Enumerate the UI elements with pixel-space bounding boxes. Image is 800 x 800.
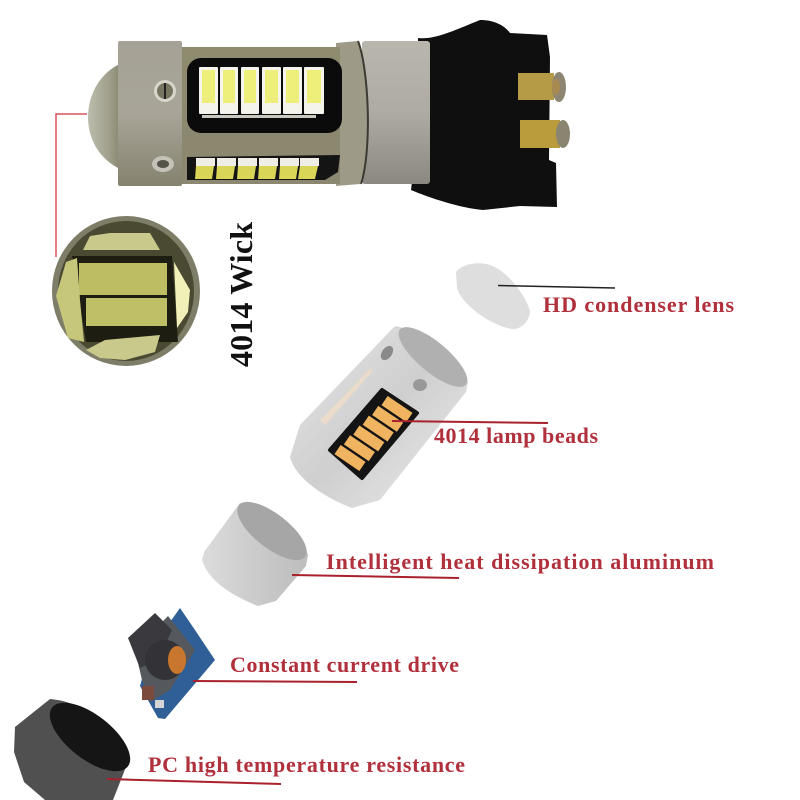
icon: base body (14, 699, 128, 800)
main bulb photo (88, 20, 570, 210)
icon: blue PCB (140, 608, 215, 719)
label: HD condenser lens: HD condenser lens (543, 292, 734, 317)
icon: inductor (145, 640, 185, 680)
icon: rear aluminum sleeve (362, 41, 430, 184)
exploded LED module (290, 318, 476, 508)
icon: lower LED tops (196, 158, 319, 166)
icon: left chip (56, 258, 84, 342)
label: Constant current drive: Constant current drive (230, 652, 459, 677)
icon: black LED window (330, 390, 417, 478)
icon: amber LEDs (334, 396, 413, 471)
icon: middle body (180, 47, 340, 184)
leader line: driver (193, 681, 357, 682)
icon: aluminum heat sink cup (202, 492, 316, 606)
leader line: lamp beads (392, 421, 548, 423)
icon: collar (336, 41, 367, 186)
icon: condenser lens (456, 263, 530, 329)
icon: capacitor (142, 686, 154, 700)
icon: outer rim (52, 216, 200, 366)
icon: driver board (128, 608, 215, 719)
icon: middle chip (79, 263, 167, 295)
icon: black plastic base (411, 20, 557, 210)
icon: shell lower hole (413, 379, 427, 391)
icon: base opening (39, 690, 141, 784)
icon: LED contacts (202, 115, 316, 118)
leader line: lens to wick (56, 114, 87, 257)
icon: cup opening (228, 492, 316, 570)
label: PC high temperature resistance: PC high temperature resistance (148, 752, 465, 777)
icon: cup body (202, 503, 308, 606)
icon: upper gold pin (518, 72, 566, 102)
icon: solder pad (155, 700, 164, 708)
leader line: PC base (107, 779, 281, 784)
icon: collar edge (358, 41, 368, 184)
icon: black choke (128, 613, 172, 668)
icon: bottom chip (86, 335, 160, 360)
label: 4014 lamp beads: 4014 lamp beads (434, 423, 598, 448)
icon: lower chip (86, 298, 167, 326)
wick close-up (52, 216, 200, 366)
icon: lower gold pin (520, 120, 570, 148)
icon: lower LED phosphor (195, 166, 318, 179)
leader line: lens (498, 286, 615, 288)
icon: cross frame (72, 256, 178, 342)
leader line: aluminum (292, 575, 459, 578)
label: 4014 Wick: 4014 Wick (223, 222, 259, 367)
icon: upper hole (154, 80, 176, 102)
icon: shell upper hole (378, 344, 396, 362)
icon: top chip (83, 233, 160, 250)
icon: board components (135, 616, 195, 702)
icon: module shell (290, 326, 468, 508)
panel: upper LED window (187, 58, 342, 133)
label: Intelligent heat dissipation aluminum: Intelligent heat dissipation aluminum (326, 549, 714, 574)
panel: lower LED window (187, 155, 340, 180)
icon: lower hole (152, 156, 174, 172)
icon: copper coil (168, 646, 186, 674)
icon: right bright chip (174, 262, 190, 328)
icon: bulb lens (88, 63, 122, 170)
icon: front head (118, 41, 182, 186)
icon: LED phosphor (202, 70, 321, 103)
icon: LED chips (199, 67, 324, 114)
icon: shell opening (390, 318, 476, 396)
icon: inner dark face (58, 221, 194, 361)
icon: PC base (14, 690, 141, 800)
icon: side LED strip (320, 368, 372, 425)
